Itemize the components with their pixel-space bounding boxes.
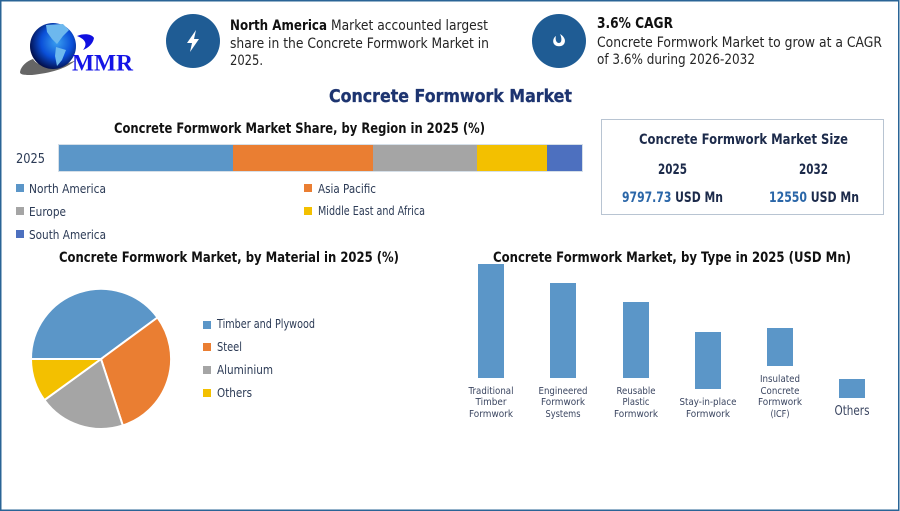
bar labels: Formwork [614,409,658,420]
pie chart [31,289,171,429]
legend: materials: Timber and Plywood [216,316,315,331]
callout: CAGR [532,14,882,68]
logo: MMR globe [20,23,133,76]
legend: materials [203,316,315,400]
bar labels: Formwork [686,409,730,420]
panel: market share by region [16,121,583,242]
panel: market size: 2032 [799,162,828,178]
panel: market by type [468,250,870,420]
bar labels: Reusable [616,386,656,397]
bar labels: Systems [546,409,580,420]
bar labels [468,374,870,420]
bar labels: Stay-in-place [680,397,736,408]
panel: market size: Concrete Formwork Market Size [639,132,848,148]
title: Concrete Formwork Market [329,86,572,107]
bar labels: Formwork [469,409,513,420]
callout: North America: share in the Concrete Formwork Market in [230,36,489,52]
legend: materials: Aluminium [217,362,273,377]
bar labels: (ICF) [770,409,790,420]
panel: market size: 2025 [658,162,687,178]
icon: flame ring [532,14,586,68]
stacked bar chart [16,144,583,172]
bar labels: Formwork [758,397,802,408]
callout: North America [166,14,489,69]
legend: regions: Europe [29,204,66,219]
legend: regions [16,181,425,242]
panel: market size [602,120,884,214]
bar labels: Engineered [538,386,588,397]
bar labels: Traditional [468,386,514,397]
bar labels: Others [834,404,870,419]
panel: market size: 9797.73 USD Mn [622,190,723,206]
callout: CAGR: 3.6% CAGR [597,14,673,32]
legend: regions: North America [29,181,106,196]
panel: market size: 12550 USD Mn [769,190,859,206]
legend: regions: Asia Pacific [318,181,376,196]
bar labels: Formwork [541,397,585,408]
legend: materials: Steel [217,339,242,354]
icon: lightning bolt [166,14,220,68]
callout: CAGR: of 3.6% during 2026-2032 [597,52,755,68]
bar labels: Insulated [760,374,800,385]
stacked bar chart: 2025 [16,152,45,167]
heading: region chart: Concrete Formwork Market Share, by Region in 2025 (%) [114,121,485,137]
legend: materials: Others [217,385,252,400]
callout: North America: 2025. [230,53,263,69]
bar labels: Plastic [622,397,650,408]
callout: North America: Market accounted largest [331,18,488,34]
bar chart [478,264,865,398]
heading: material chart: Concrete Formwork Market, by Material in 2025 (%) [59,250,399,266]
callout: North America: North America [230,18,327,34]
logo: MMR globe: MMR [72,50,133,76]
bar labels: Timber [475,397,507,408]
bar labels: Concrete [760,386,800,397]
legend: regions: South America [29,227,106,242]
panel: market by material [31,250,399,429]
legend: regions: Middle East and Africa [318,203,425,218]
